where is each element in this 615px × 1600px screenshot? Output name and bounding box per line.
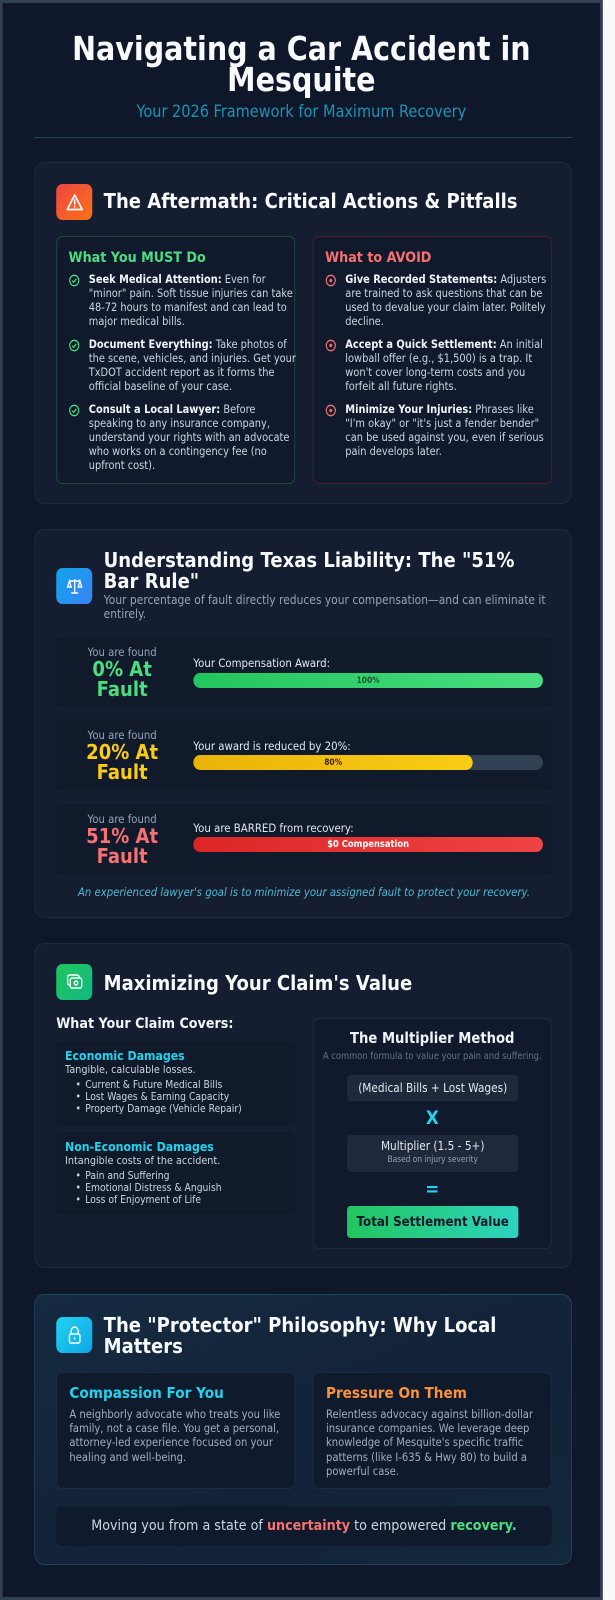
formula: multiplier: Multiplier (1.5 - 5+) (381, 1139, 484, 1153)
box: pressure: knowledge of Mesquite's specific traffic (326, 1435, 523, 1449)
row: 20%: Your award is reduced by 20%: (193, 739, 351, 753)
box: pressure: Pressure On Them (326, 1384, 467, 1402)
box: non-economic: Emotional Distress & Anguish (85, 1182, 222, 1194)
title (72, 30, 531, 99)
box: pressure: powerful case. (326, 1464, 399, 1478)
box: economic: Tangible, calculable losses. (65, 1063, 196, 1076)
box: non-economic: Intangible costs of the accident. (65, 1154, 220, 1167)
heading: The "Protector" Philosophy: Why Local (104, 1313, 496, 1337)
item: pain develops later. (345, 445, 442, 458)
box: compassion: family, not a case file. You get a personal, (69, 1421, 279, 1435)
panel: multiplier (313, 1018, 552, 1249)
item: Document Everything: Take photos of (89, 338, 287, 351)
box: pressure: insurance companies. We leverage deep (326, 1421, 529, 1435)
formula: total: Total Settlement Value (357, 1214, 509, 1230)
panel: must do (56, 236, 295, 484)
row: 20%: 20% At (86, 740, 158, 764)
heading: The Aftermath: Critical Actions & Pitfalls (104, 189, 518, 213)
item: Minimize Your Injuries: Phrases like (345, 403, 534, 416)
icon: warning (56, 184, 92, 220)
item: can be used against you, even if serious (345, 431, 544, 444)
panel: avoid (313, 236, 552, 484)
panel: multiplier: A common formula to value your pain and suffering. (323, 1051, 542, 1062)
heading: avoid: What to AVOID (325, 250, 431, 266)
banner: Moving you from a state of uncertainty to empowered recovery. (91, 1518, 517, 1534)
subtitle: Your percentage of fault directly reduces your compensation—and can eliminate it (104, 593, 546, 607)
bar: 80%: 80% (324, 758, 342, 768)
panel: multiplier: X (426, 1107, 439, 1129)
panel: aftermath (34, 162, 572, 504)
row: 0% (56, 637, 552, 707)
box: compassion: attorney-led experience focused on your (69, 1435, 273, 1449)
heading: must do: What You MUST Do (69, 250, 206, 266)
heading: Bar Rule" (104, 568, 199, 592)
row: 20%: You are found (88, 728, 157, 742)
item: Seek Medical Attention: Even for (89, 273, 266, 286)
banner (56, 1506, 552, 1546)
item (326, 273, 546, 328)
row: 20% (56, 720, 552, 790)
item: lowball offer (e.g., $1,500) is a trap. It (345, 352, 532, 365)
bar: 100%: 100% (357, 676, 380, 686)
item: decline. (345, 315, 384, 328)
panel: multiplier: = (425, 1178, 439, 1200)
item: upfront cost). (89, 459, 155, 472)
row: 20%: Fault (97, 760, 148, 784)
box: compassion: healing and well-being. (69, 1450, 186, 1464)
box: economic (56, 1041, 295, 1125)
box: economic: Current & Future Medical Bills (85, 1079, 222, 1091)
icon: money (56, 964, 92, 1000)
subtitle (104, 593, 546, 621)
box: economic: Lost Wages & Earning Capacity (85, 1091, 229, 1103)
box: non-economic: Loss of Enjoyment of Life (85, 1194, 201, 1206)
heading (104, 548, 514, 592)
item: 48-72 hours to manifest and can lead to (89, 301, 287, 314)
subtitle: Your 2026 Framework for Maximum Recovery (136, 102, 466, 121)
row: 51%: You are found (88, 812, 157, 826)
subheading: What Your Claim Covers: (56, 1016, 233, 1032)
box: compassion: Compassion For You (69, 1384, 224, 1402)
item: "I'm okay" or "it's just a fender bender" (345, 417, 539, 430)
item (69, 403, 289, 472)
bar: 80% (193, 755, 543, 770)
item: Consult a Local Lawyer: Before (89, 403, 255, 416)
icon: lock (56, 1317, 92, 1353)
panel: claim value (34, 943, 572, 1268)
item: are trained to ask questions that can be (345, 287, 542, 300)
heading (104, 1313, 496, 1358)
item (326, 338, 543, 393)
bar: 100% (193, 673, 543, 688)
item: "minor" pain. Soft tissue injuries can take (89, 287, 293, 300)
box: economic: Property Damage (Vehicle Repair) (85, 1103, 242, 1115)
item: used to devalue your claim later. Politely (345, 301, 546, 314)
item: TxDOT accident report as it forms the (89, 366, 274, 379)
box: non-economic: Non-Economic Damages (65, 1139, 214, 1154)
box: pressure: Relentless advocacy against billion-dollar (326, 1407, 533, 1421)
box: pressure (313, 1372, 552, 1489)
item: who works on a contingency fee (no (89, 445, 267, 458)
heading: Matters (104, 1334, 183, 1358)
item: won't cover long-term costs and you (345, 366, 525, 379)
row: 51%: You are BARRED from recovery: (193, 821, 354, 835)
row: 0%: 0% At (92, 657, 152, 681)
bar: $0 (193, 837, 543, 852)
box: compassion: A neighborly advocate who treats you like (69, 1407, 280, 1421)
heading: Understanding Texas Liability: The "51% (104, 548, 514, 572)
box: compassion (56, 1372, 295, 1489)
item: forfeit all future rights. (345, 380, 457, 393)
row: 51%: 51% At (86, 824, 158, 848)
icon: scales (56, 568, 92, 604)
panel: protector (34, 1294, 572, 1565)
item: major medical bills. (89, 315, 185, 328)
subtitle: entirely. (104, 607, 146, 621)
formula: multiplier (347, 1135, 518, 1172)
item: speaking to any insurance company, (89, 417, 270, 430)
title: Navigating a Car Accident in (72, 30, 531, 68)
item (69, 273, 293, 328)
formula: multiplier: Based on injury severity (387, 1155, 478, 1165)
item: understand your rights with an advocate (89, 431, 289, 444)
item: official baseline of your case. (89, 380, 232, 393)
row: 51%: Fault (97, 844, 148, 868)
footnote: An experienced lawyer's goal is to minimize your assigned fault to protect your recovery. (78, 885, 530, 899)
row: 0%: Your Compensation Award: (193, 656, 330, 670)
item (326, 403, 544, 458)
row: 0%: You are found (88, 645, 157, 659)
row: 51% (56, 804, 552, 874)
row: 0%: Fault (97, 677, 148, 701)
formula: total (347, 1206, 518, 1238)
box: pressure: patterns (like I-635 & Hwy 80) to build a (326, 1450, 527, 1464)
item: Give Recorded Statements: Adjusters (345, 273, 546, 286)
title: Mesquite (227, 61, 376, 99)
box: economic: Economic Damages (65, 1048, 185, 1063)
box: non-economic: Pain and Suffering (85, 1170, 169, 1182)
bar: $0: $0 Compensation (327, 839, 409, 850)
heading: Maximizing Your Claim's Value (104, 971, 412, 995)
formula: base (347, 1075, 518, 1101)
item: the scene, vehicles, and injuries. Get your (89, 352, 296, 365)
formula: base: (Medical Bills + Lost Wages) (358, 1081, 507, 1095)
box: non-economic (56, 1132, 295, 1215)
panel: multiplier: The Multiplier Method (350, 1029, 514, 1047)
item (69, 338, 296, 393)
item: Accept a Quick Settlement: An initial (345, 338, 543, 351)
panel: liability (34, 529, 572, 918)
